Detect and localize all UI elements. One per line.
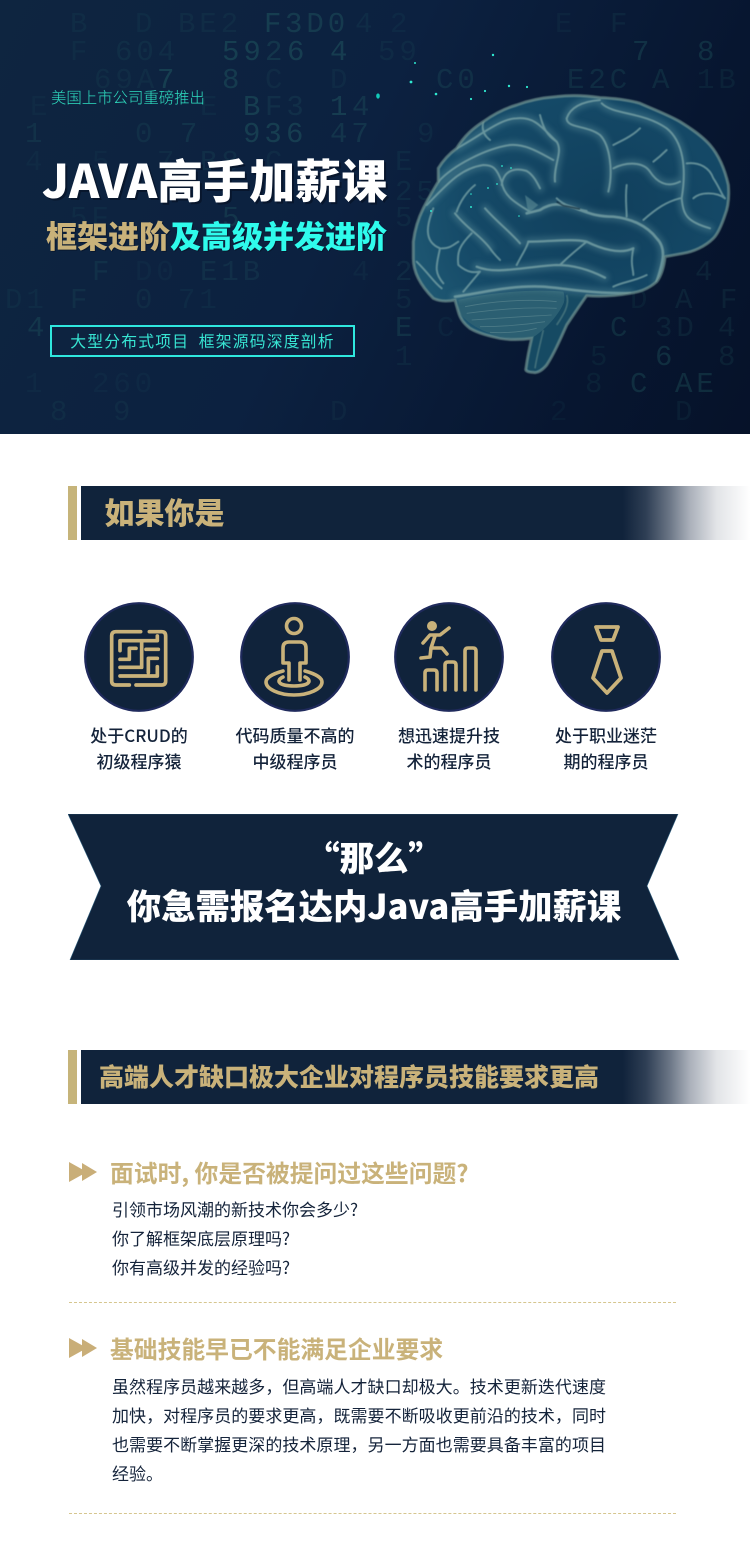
- background digits: 4: [27, 312, 48, 345]
- background digits: 4: [25, 146, 46, 179]
- heading: basic skills: 基础技能早已不能满足企业要求: [110, 1330, 443, 1365]
- background digits: E: [30, 91, 51, 124]
- main title: JAVA高手加薪课: [42, 146, 387, 212]
- background digits: C: [437, 312, 458, 345]
- background digits: 5: [590, 341, 611, 374]
- background digits: 5: [222, 202, 243, 235]
- ribbon text: “那么”: [305, 830, 443, 880]
- background digits: F3: [265, 91, 308, 124]
- background digits: 5: [92, 146, 113, 179]
- background digits: D: [135, 8, 156, 41]
- background digits: D: [330, 396, 351, 429]
- background digits: 9: [417, 118, 438, 151]
- section header: 如果你是: [68, 486, 740, 540]
- background digits: 2: [395, 256, 416, 289]
- interview questions: [112, 1196, 358, 1279]
- interview questions: 你了解框架底层原理吗?: [112, 1225, 290, 1250]
- background digits: B8: [200, 146, 243, 179]
- background digits: D: [675, 396, 696, 429]
- background digits: E: [200, 91, 221, 124]
- background digits: C: [265, 64, 286, 97]
- tagline: 美国上市公司重磅推出: [51, 86, 205, 108]
- background digits: 1: [25, 118, 46, 151]
- background digits: 6: [655, 341, 676, 374]
- icon: climbing figure and bars: [394, 602, 504, 712]
- background digits: 604: [115, 36, 179, 69]
- background digits: 3D0: [285, 8, 349, 41]
- callout ribbon: [68, 814, 680, 960]
- caption 4: 期的程序员: [564, 748, 648, 773]
- background digits: E: [395, 146, 416, 179]
- caption 1: 初级程序猿: [96, 748, 182, 773]
- ribbon text: 你急需报名达内Java高手加薪课: [127, 878, 621, 928]
- background digits: F: [70, 36, 91, 69]
- background digits: D: [630, 284, 651, 317]
- brain rim: [413, 96, 729, 373]
- stem: [528, 302, 564, 371]
- background digits: 71: [178, 284, 221, 317]
- background digits: 2: [390, 8, 411, 41]
- background digits: 8: [50, 396, 71, 429]
- background digits: B: [70, 8, 91, 41]
- section header: 高端人才: 高端人才缺口极大企业对程序员技能要求更高: [99, 1058, 599, 1094]
- caption 2: 代码质量不高的: [236, 722, 354, 746]
- icon: person on target: [240, 602, 350, 712]
- background digits: 0: [135, 118, 156, 151]
- section header: 高端人才: [68, 1050, 740, 1104]
- caption 2: 中级程序员: [252, 748, 338, 773]
- background digits: F: [92, 256, 113, 289]
- caption 4: [555, 722, 657, 773]
- background digits: 8: [718, 341, 739, 374]
- background digits: E: [555, 8, 576, 41]
- background digits: C: [630, 368, 651, 401]
- background digits: 25: [395, 176, 438, 209]
- background digits: AE: [675, 368, 718, 401]
- background digits: 93: [243, 118, 286, 151]
- background digits: E: [395, 312, 416, 345]
- background digits: C: [265, 146, 286, 179]
- background digits: 2: [550, 396, 571, 429]
- background digits: 5: [395, 284, 416, 317]
- background digits: E1B: [200, 256, 264, 289]
- background digits: 47: [330, 118, 373, 151]
- background digits: 7: [180, 118, 201, 151]
- background digits: 1: [330, 91, 351, 124]
- background digits: C: [610, 312, 631, 345]
- caption 1: [90, 722, 188, 773]
- background digits: 59: [222, 36, 265, 69]
- particles: [376, 54, 528, 217]
- background digits: 2: [265, 36, 286, 69]
- section header: 如果你是: 如果你是: [104, 489, 224, 533]
- background digits: 8: [585, 368, 606, 401]
- background digits: 7: [632, 36, 653, 69]
- interview questions: 你有高级并发的经验吗?: [112, 1254, 290, 1279]
- background digits: 1: [25, 368, 46, 401]
- icon: necktie: [551, 602, 661, 712]
- sulcus notch: [525, 195, 538, 213]
- ribbon text: [127, 830, 621, 928]
- background digits: F: [720, 284, 741, 317]
- background digits: 4: [352, 91, 373, 124]
- background digits: E2C: [567, 64, 631, 97]
- background digits: 54: [395, 202, 438, 235]
- interview questions: 引领市场风潮的新技术你会多少?: [112, 1196, 358, 1221]
- background digits: F: [610, 8, 631, 41]
- background digits: 4: [695, 256, 716, 289]
- background digits: D: [330, 64, 351, 97]
- background digits: 6: [286, 118, 307, 151]
- caption 2: [236, 722, 354, 773]
- background digits: 5F: [70, 202, 113, 235]
- background digits: 4: [330, 36, 351, 69]
- background digits: [5, 8, 741, 429]
- background digits: A: [675, 284, 696, 317]
- tag box: [50, 325, 355, 357]
- cerebellum: [458, 291, 564, 339]
- background digits: B: [243, 91, 264, 124]
- background digits: 4: [355, 8, 376, 41]
- background digits: 3D: [655, 312, 698, 345]
- background digits: F: [70, 284, 91, 317]
- background digits: 260: [92, 368, 156, 401]
- background digits: 4: [718, 312, 739, 345]
- ribbon shape: [68, 814, 680, 960]
- icon: double arrow 2: [69, 1338, 97, 1358]
- heading: interview: 面试时, 你是否被提问过这些问题?: [110, 1154, 469, 1189]
- caption 4: 处于职业迷茫: [555, 722, 657, 746]
- background digits: 1: [395, 341, 416, 374]
- background digits: 1B: [697, 64, 740, 97]
- background digits: 59: [378, 36, 421, 69]
- background digits: 9: [113, 396, 134, 429]
- hero banner: [0, 0, 750, 434]
- caption 3: 想迅速提升技: [398, 722, 500, 746]
- background digits: 69A: [94, 64, 158, 97]
- caption 3: [398, 722, 500, 773]
- gyri ridges: [417, 100, 725, 297]
- background digits: D1: [5, 284, 48, 317]
- background digits: BE2: [178, 8, 242, 41]
- basic skills paragraph: 虽然程序员越来越多，但高端人才缺口却极大。技术更新迭代速度加快，对程序员的要求更高，既需要不断吸收更前沿的技术，同时也需要不断掌握更深的技术原理，另一方面也需要具备丰富的项目经验。: [112, 1373, 606, 1485]
- background digits: D0: [135, 256, 178, 289]
- background digits: 6: [287, 36, 308, 69]
- tag box: 大型分布式项目 框架源码深度剖析: [70, 329, 335, 352]
- background digits: 7: [157, 64, 178, 97]
- icon: maze: [84, 602, 194, 712]
- background digits: 4: [352, 256, 373, 289]
- background digits: F: [264, 8, 285, 41]
- subtitle: 框架进阶及高级并发进阶: [46, 212, 387, 257]
- background digits: 0: [135, 284, 156, 317]
- background digits: 8: [222, 64, 243, 97]
- background digits: 8: [697, 36, 718, 69]
- background digits: C0: [436, 64, 479, 97]
- caption 1: 处于CRUD的: [90, 722, 188, 746]
- background digits: 7: [157, 146, 178, 179]
- brain illustration: [411, 94, 731, 375]
- background digits: A: [652, 64, 673, 97]
- icon: double arrow 1: [69, 1162, 97, 1182]
- caption 3: 术的程序员: [406, 748, 492, 773]
